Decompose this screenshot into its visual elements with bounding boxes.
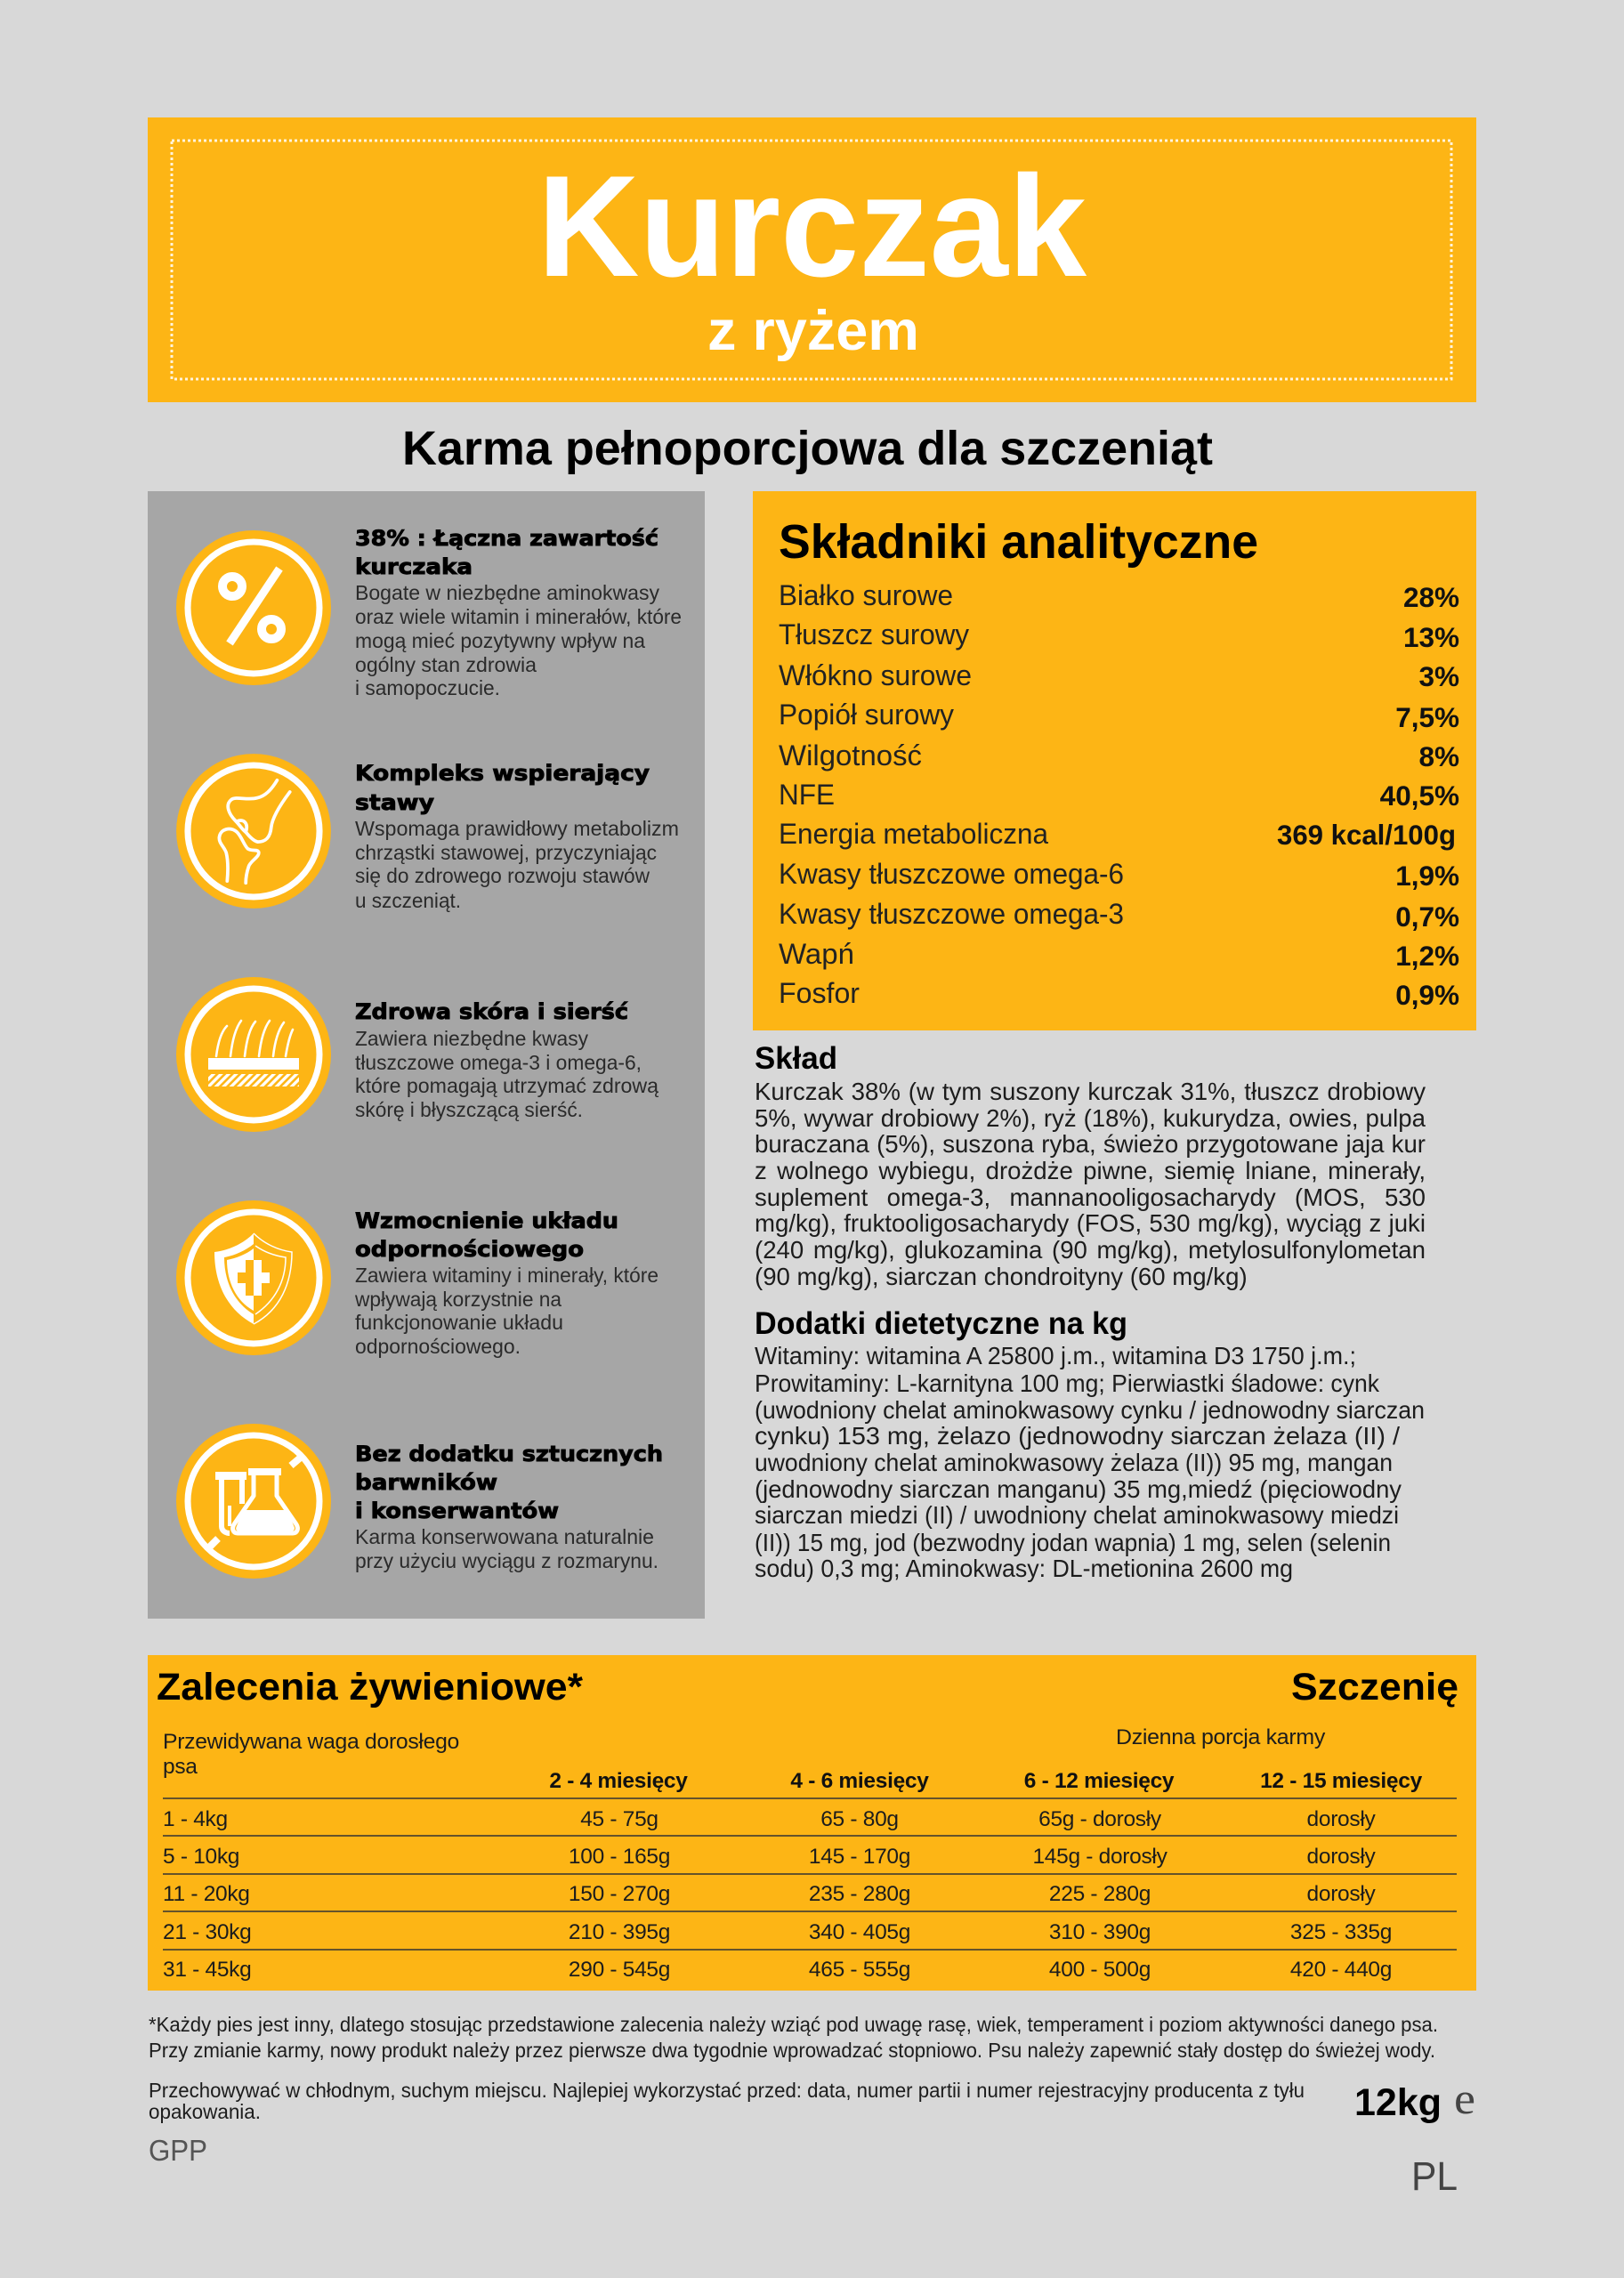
benefit text: mogą mieć pozytywny wpływ na — [355, 629, 646, 652]
table row: 5-10 kg: 145g - dorosły — [1032, 1845, 1168, 1869]
analytical values: 369 kcal/100g — [1277, 819, 1456, 851]
table row: 31-45 kg: 31 - 45kg — [163, 1958, 251, 1982]
benefit: joints — [176, 754, 679, 912]
additives text: siarczan miedzi (II) / uwodniony chelat aminokwasowy miedzi — [755, 1501, 1399, 1529]
analytical values: 40,5% — [1380, 780, 1459, 812]
benefit text: ogólny stan zdrowia — [355, 653, 537, 676]
benefit text — [355, 1442, 663, 1572]
benefit text: Wzmocnienie układu — [355, 1208, 618, 1233]
analytical values: 1,9% — [1395, 860, 1459, 892]
analytical values: 13% — [1403, 621, 1459, 653]
benefit text — [354, 1208, 658, 1358]
benefit text: Bez dodatku sztucznych — [355, 1442, 663, 1466]
storage note: Przechowywać w chłodnym, suchym miejscu. Najlepiej wykorzystać przed: data, numer partii i numer rejestracyjny producenta z tyłu — [149, 2079, 1305, 2102]
table row: 1-4 kg — [163, 1807, 1376, 1831]
composition text: 5%, wywar drobiowy 2%), ryż (18%), kukurydza, owies, pulpa — [755, 1104, 1426, 1132]
benefit text: Bogate w niezbędne aminokwasy — [355, 581, 659, 604]
benefit text: się do zdrowego rozwoju stawów — [355, 864, 650, 887]
icon: shield — [176, 1200, 331, 1355]
panel: analytical constituents — [753, 491, 1476, 1030]
additives text: sodu) 0,3 mg; Aminokwasy: DL-metionina 2600 mg — [755, 1555, 1293, 1582]
analytical labels: Tłuszcz surowy — [779, 618, 970, 650]
table header: 2 - 4 miesięcy — [549, 1769, 688, 1793]
table row: 31-45 kg: 290 - 545g — [569, 1958, 670, 1982]
table row: 31-45 kg — [163, 1958, 1392, 1982]
composition text: Kurczak 38% (w tym suszony kurczak 31%, tłuszcz drobiowy — [755, 1078, 1426, 1105]
benefit text: które pomagają utrzymać zdrową — [355, 1074, 659, 1097]
composition text: suplement omega-3, mannanooligosacharydy (MOS, 530 — [755, 1183, 1426, 1211]
benefit text: u szczeniąt. — [355, 889, 461, 912]
benefit text — [355, 761, 679, 912]
footnote: *Każdy pies jest inny, dlatego stosując przedstawione zalecenia należy wziąć pod uwagę rasę, wiek, temperament i poziom aktywności danego psa. — [149, 2013, 1438, 2036]
composition text: (90 mg/kg), siarczan chondroityny (60 mg/kg) — [755, 1263, 1248, 1290]
table row: 21-30 kg: 210 - 395g — [569, 1920, 670, 1944]
benefit text: Wspomaga prawidłowy metabolizm — [355, 817, 679, 840]
composition text: z wolnego wybiegu, drożdże piwne, siemię lniane, minerały, — [755, 1157, 1426, 1184]
icon: crossed-out lab flask — [176, 1424, 331, 1579]
analytical values: 7,5% — [1395, 701, 1459, 733]
benefit text: funkcjonowanie układu — [355, 1311, 563, 1334]
benefit text: Karma konserwowana naturalnie — [355, 1525, 654, 1548]
composition text: (240 mg/kg), glukozamina (90 mg/kg), metylosulfonylometan — [755, 1236, 1426, 1264]
analytical values — [1277, 581, 1459, 1011]
analytical values: 8% — [1418, 740, 1459, 772]
benefit text: tłuszczowe omega-3 i omega-6, — [355, 1051, 642, 1074]
additives text: Witaminy: witamina A 25800 j.m., witamina D3 1750 j.m.; — [755, 1342, 1356, 1369]
table header: 12 - 15 miesięcy — [1260, 1769, 1423, 1793]
table header: 4 - 6 miesięcy — [790, 1769, 929, 1793]
table row: 21-30 kg: 21 - 30kg — [163, 1920, 251, 1944]
table row: 21-30 kg: 310 - 390g — [1049, 1920, 1151, 1944]
benefit text: stawy — [355, 790, 434, 815]
additives text — [755, 1342, 1425, 1582]
table row: 21-30 kg: 340 - 405g — [809, 1920, 910, 1944]
analytical heading: Składniki analityczne — [779, 515, 1258, 569]
table row: 5-10 kg — [163, 1845, 1376, 1869]
analytical labels: Kwasy tłuszczowe omega-3 — [779, 898, 1124, 930]
benefit: chicken content — [176, 526, 682, 699]
analytical values: 0,7% — [1395, 901, 1459, 933]
composition text: mg/kg), fruktooligosacharydy (FOS, 530 mg/kg), wyciąg z juki — [755, 1209, 1426, 1237]
language code: PL — [1411, 2153, 1458, 2199]
benefit text: Zawiera niezbędne kwasy — [355, 1027, 588, 1050]
benefit text: skórę i błyszczącą sierść. — [355, 1098, 583, 1121]
table row: 5-10 kg: 5 - 10kg — [163, 1845, 239, 1869]
feeding heading: Zalecenia żywieniowe* — [157, 1666, 583, 1708]
analytical values: 1,2% — [1395, 940, 1459, 972]
analytical values: 3% — [1418, 660, 1459, 692]
title: Kurczak — [537, 146, 1087, 307]
benefit text: 38% : Łączna zawartość — [355, 526, 658, 551]
storage note — [149, 2079, 1305, 2123]
benefit: skin and coat — [176, 977, 659, 1132]
benefit text: odpornościowego. — [355, 1335, 521, 1358]
benefit text: oraz wiele witamin i minerałów, które — [355, 605, 682, 628]
benefit text: i samopoczucie. — [355, 676, 500, 699]
table row: 11-20 kg: 235 - 280g — [809, 1882, 910, 1906]
additives text: (uwodniony chelat aminokwasowy cynku / jednowodny siarczan — [755, 1396, 1425, 1424]
weight column heading — [163, 1730, 459, 1779]
composition text: buraczana (5%), suszona ryba, świeżo przygotowane jaja kur — [755, 1130, 1426, 1158]
analytical labels: Kwasy tłuszczowe omega-6 — [779, 858, 1124, 890]
additives text: (II)) 15 mg, jod (bezwodny jodan wapnia) 1 mg, selen (selenin — [755, 1529, 1391, 1556]
table row: 5-10 kg: dorosły — [1307, 1845, 1376, 1869]
benefit text: Zawiera witaminy i minerały, które — [355, 1264, 658, 1287]
benefit text — [355, 526, 682, 699]
benefit text: barwników — [355, 1470, 497, 1495]
table row: 1-4 kg: 45 - 75g — [580, 1807, 658, 1831]
header banner — [148, 117, 1476, 402]
additives text: (jednowodny siarczan manganu) 35 mg,miedź (pięciowodny — [755, 1475, 1402, 1503]
footnote — [149, 2013, 1438, 2062]
table row: 11-20 kg: 150 - 270g — [569, 1882, 670, 1906]
benefit text: przy użyciu wyciągu z rozmarynu. — [355, 1549, 658, 1572]
table row: 1-4 kg: 65g - dorosły — [1038, 1807, 1162, 1831]
product type heading: Karma pełnoporcjowa dla szczeniąt — [402, 422, 1213, 475]
weight column heading: psa — [163, 1755, 198, 1779]
net weight: 12kg — [1354, 2081, 1442, 2124]
analytical labels: Wilgotność — [779, 739, 922, 771]
icon: percent — [176, 530, 331, 685]
additives text: uwodniony chelat aminokwasowy żelaza (II)) 95 mg, mangan — [755, 1449, 1393, 1476]
analytical labels: Białko surowe — [779, 579, 953, 611]
table row: 11-20 kg: dorosły — [1307, 1882, 1376, 1906]
analytical values: 0,9% — [1395, 979, 1459, 1011]
analytical values: 28% — [1403, 581, 1459, 613]
additives heading: Dodatki dietetyczne na kg — [755, 1306, 1127, 1341]
table row: 11-20 kg: 225 - 280g — [1049, 1882, 1151, 1906]
table row: 5-10 kg: 100 - 165g — [569, 1845, 670, 1869]
table row: 21-30 kg: 325 - 335g — [1290, 1920, 1392, 1944]
benefit: no artificial additives — [176, 1424, 663, 1579]
analytical labels: Fosfor — [779, 977, 860, 1009]
benefit text: wpływają korzystnie na — [354, 1288, 562, 1311]
analytical labels: Włókno surowe — [779, 659, 972, 691]
footnote: Przy zmianie karmy, nowy produkt należy przez pierwsze dwa tygodnie wprowadzać stopniowo. Psu należy zapewnić stały dostęp do świeżej wody. — [149, 2039, 1435, 2062]
table header: 6 - 12 miesięcy — [1024, 1769, 1175, 1793]
subtitle: z ryżem — [707, 300, 919, 362]
benefit text: odpornościowego — [355, 1237, 584, 1262]
benefit text: Kompleks wspierający — [355, 761, 650, 786]
composition heading: Skład — [755, 1041, 837, 1076]
analytical labels: Popiół surowy — [779, 699, 955, 731]
net weight — [1354, 2073, 1475, 2124]
analytical labels: NFE — [779, 779, 835, 811]
puppy label: Szczenię — [1291, 1666, 1458, 1708]
table row: 1-4 kg: 1 - 4kg — [163, 1807, 228, 1831]
table row: 21-30 kg — [163, 1920, 1392, 1944]
icon: skin and hair — [176, 977, 331, 1132]
benefit text: kurczaka — [355, 554, 473, 579]
panel: feeding recommendations — [148, 1655, 1476, 1991]
table row: 11-20 kg — [163, 1882, 1376, 1906]
daily portion heading: Dzienna porcja karmy — [1116, 1725, 1326, 1749]
analytical labels — [779, 579, 1124, 1009]
benefit text: i konserwantów — [355, 1498, 559, 1523]
icon: joint — [176, 754, 331, 909]
analytical labels: Wapń — [779, 938, 854, 970]
benefit text — [355, 999, 659, 1121]
table row: 31-45 kg: 420 - 440g — [1290, 1958, 1392, 1982]
weight column heading: Przewidywana waga dorosłego — [163, 1730, 459, 1754]
composition text — [755, 1078, 1426, 1290]
table row: 1-4 kg: 65 - 80g — [820, 1807, 899, 1831]
benefit: immune system — [176, 1200, 658, 1358]
table row: 11-20 kg: 11 - 20kg — [163, 1882, 250, 1906]
code: GPP: GPP — [149, 2134, 207, 2167]
net weight: e — [1454, 2073, 1475, 2123]
additives text: cynku) 153 mg, żelazo (jednowodny siarczan żelaza (II) / — [755, 1422, 1400, 1450]
table row: 1-4 kg: dorosły — [1307, 1807, 1376, 1831]
table row: 31-45 kg: 400 - 500g — [1049, 1958, 1151, 1982]
additives text: Prowitaminy: L-karnityna 100 mg; Pierwiastki śladowe: cynk — [755, 1369, 1380, 1397]
analytical labels: Energia metaboliczna — [779, 818, 1049, 850]
table row: 5-10 kg: 145 - 170g — [809, 1845, 910, 1869]
benefit text: Zdrowa skóra i sierść — [355, 999, 628, 1024]
storage note: opakowania. — [149, 2100, 261, 2123]
table row: 31-45 kg: 465 - 555g — [809, 1958, 910, 1982]
panel: benefits — [148, 491, 705, 1619]
benefit text: chrząstki stawowej, przyczyniając — [355, 841, 657, 864]
table header — [549, 1769, 1423, 1793]
